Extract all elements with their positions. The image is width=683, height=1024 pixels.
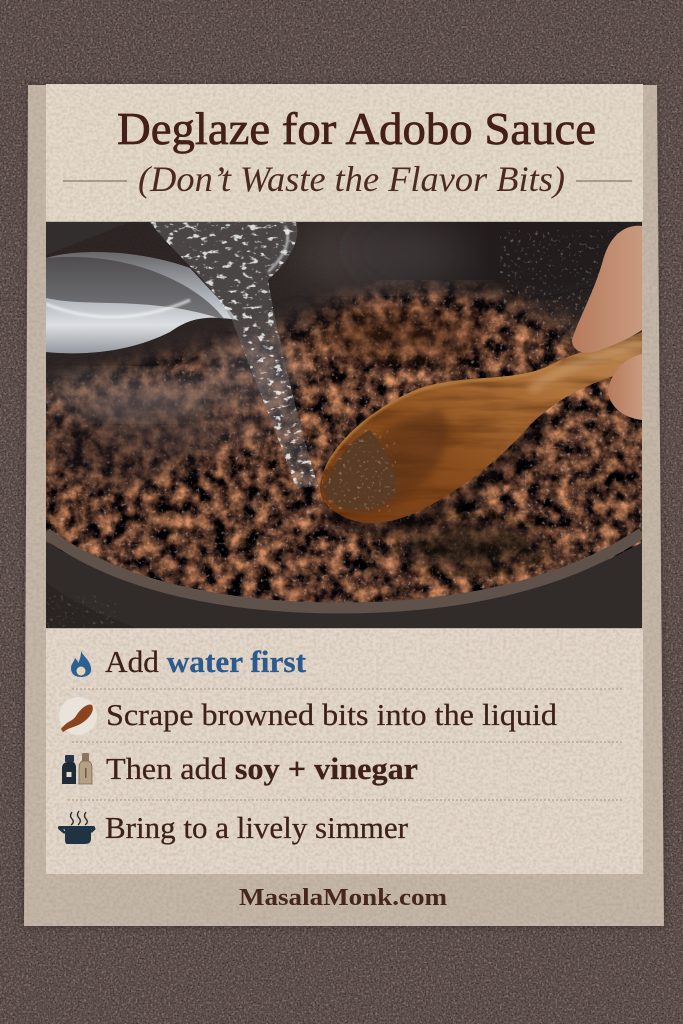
wooden spoon: [315, 328, 645, 533]
browned bits: [25, 280, 642, 620]
steam: [40, 221, 470, 419]
glass pitcher: [46, 222, 238, 353]
step 2 text: Scrape browned bits into the liquid: [106, 698, 557, 732]
step 4 text: Bring to a lively simmer: [105, 811, 408, 845]
subtitle: (Don’t Waste the Flavor Bits): [138, 159, 565, 199]
photo: water poured into pan while a wooden spoon scrapes: [46, 222, 642, 628]
step 1 text: Add water first: [105, 645, 307, 679]
icon: wooden spatula on plate: [59, 697, 97, 735]
hand: [572, 226, 642, 420]
card backing: [24, 85, 664, 926]
panel: header: [46, 84, 643, 221]
footer: website: MasalaMonk.com: [239, 885, 447, 911]
pan interior and speckle: [372, 222, 632, 338]
step 3 text: Then add soy + vinegar: [106, 752, 418, 786]
pouring water: [150, 222, 320, 492]
title: Deglaze for Adobo Sauce: [117, 103, 596, 154]
icon: soy and vinegar bottles: [62, 753, 92, 784]
icon: steaming pot: [58, 811, 95, 844]
panel: steps: [46, 629, 643, 874]
pan rim: [40, 533, 650, 634]
icon: blue flame: [71, 651, 91, 677]
